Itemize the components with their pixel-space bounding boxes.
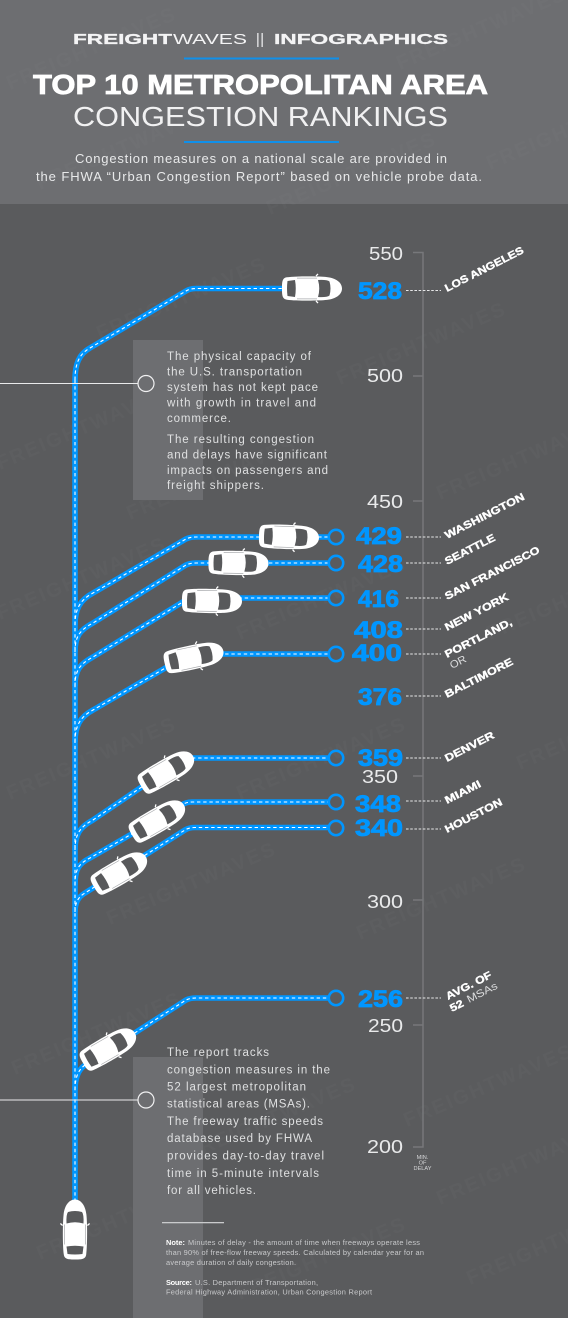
note: Note: xyxy=(166,1238,185,1247)
leader lines xyxy=(406,290,441,998)
top header rule xyxy=(184,58,339,60)
text block: report: 52 largest metropolitan xyxy=(167,1082,306,1094)
text block: capacity: impacts on passengers and xyxy=(167,465,328,477)
metro labels: OR xyxy=(448,653,469,672)
text block: report: provides day-to-day travel xyxy=(167,1150,324,1162)
icon: car Houston xyxy=(87,844,153,900)
subtitle: Congestion measures on a national scale are provided in xyxy=(75,151,447,166)
source xyxy=(166,1278,372,1296)
brand line: FREIGHT xyxy=(73,32,172,48)
axis: 450 xyxy=(367,491,403,512)
callout: capacity connector xyxy=(0,376,154,392)
metro labels: SEATTLE xyxy=(443,532,497,568)
brand line xyxy=(73,32,449,48)
text block: report: congestion measures in the xyxy=(167,1064,330,1076)
values: 340 xyxy=(355,815,403,842)
subtitle: the FHWA “Urban Congestion Report” based on vehicle probe data. xyxy=(36,169,482,184)
source: U.S. Department of Transportation, xyxy=(195,1278,318,1287)
brand line: INFOGRAPHICS xyxy=(274,32,449,48)
icon: car Seattle xyxy=(208,548,269,578)
callout: report connector xyxy=(0,1092,154,1108)
axis unit: OF xyxy=(419,1160,427,1166)
note: than 90% of free-flow freeway speeds. Calculated by calendar year for an xyxy=(166,1248,424,1257)
metro labels: AVG. OF xyxy=(444,969,495,1003)
text block: capacity: The physical capacity of xyxy=(167,351,312,363)
title xyxy=(33,69,488,132)
text block: capacity xyxy=(166,351,328,492)
source: Federal Highway Administration, Urban Congestion Report xyxy=(166,1288,372,1296)
note: Minutes of delay - the amount of time when freeways operate less xyxy=(188,1238,420,1247)
metro labels xyxy=(443,244,542,1015)
bottom header rule xyxy=(184,141,339,143)
metro labels: LOS ANGELES xyxy=(443,244,526,295)
axis: 300 xyxy=(367,891,403,912)
title: TOP 10 METROPOLITAN AREA xyxy=(33,69,488,100)
header panel xyxy=(0,0,568,204)
road end markers xyxy=(329,530,343,1005)
icon: car Denver xyxy=(134,743,200,799)
brand line: || xyxy=(256,32,264,48)
values: 429 xyxy=(356,523,402,550)
metro labels: NEW YORK xyxy=(443,591,511,634)
callout shade 1 xyxy=(133,340,203,500)
text block: capacity: The resulting congestion xyxy=(167,434,314,446)
text block: report xyxy=(167,1047,330,1197)
text block: report: for all vehicles. xyxy=(167,1185,256,1197)
values xyxy=(352,278,403,1013)
source: Source: xyxy=(166,1278,192,1287)
text block: capacity: commerce. xyxy=(167,413,231,425)
text block: capacity: freight shippers. xyxy=(167,480,264,492)
axis unit: DELAY xyxy=(414,1166,432,1172)
text block: capacity: and delays have significant xyxy=(167,450,328,462)
metro labels: WASHINGTON xyxy=(443,491,527,542)
icon: car San Francisco xyxy=(182,586,242,616)
icon: car start xyxy=(60,1200,90,1260)
note xyxy=(166,1238,424,1267)
icon: car Los Angeles xyxy=(282,274,342,303)
values: 416 xyxy=(358,586,399,613)
metro labels: MSAs xyxy=(465,980,500,1006)
axis: 550 xyxy=(369,243,403,264)
metro labels: BALTIMORE xyxy=(443,656,515,701)
text block: report: database used by FHWA xyxy=(167,1133,312,1145)
icon: car Miami xyxy=(125,792,191,848)
notes divider xyxy=(162,1222,224,1223)
text block: capacity: the U.S. transportation xyxy=(167,366,302,378)
text block: capacity: with growth in travel and xyxy=(166,398,316,410)
metro labels: MIAMI xyxy=(443,778,483,807)
brand line: WAVES xyxy=(173,32,247,48)
note: average duration of daily congestion. xyxy=(166,1258,296,1267)
text block: report: The freeway traffic speeds xyxy=(167,1116,323,1128)
text block: report: statistical areas (MSAs). xyxy=(167,1098,310,1110)
axis: 500 xyxy=(367,365,403,386)
axis: 250 xyxy=(368,1015,403,1036)
values: 348 xyxy=(355,791,401,818)
values: 408 xyxy=(354,617,403,644)
metro labels: DENVER xyxy=(443,729,497,765)
axis: 350 xyxy=(362,766,398,787)
values: 400 xyxy=(352,640,402,667)
icon: car average xyxy=(76,1020,142,1076)
metro labels: PORTLAND, xyxy=(443,616,514,661)
axis unit xyxy=(414,1155,432,1172)
icon: car Portland xyxy=(162,636,226,678)
icon: car Washington xyxy=(259,521,319,553)
axis unit: MIN. xyxy=(417,1155,429,1161)
subtitle xyxy=(36,151,482,184)
road network xyxy=(75,288,330,1205)
metro labels: HOUSTON xyxy=(443,796,504,836)
title: CONGESTION RANKINGS xyxy=(73,101,448,132)
values: 359 xyxy=(358,745,403,772)
metro labels: SAN FRANCISCO xyxy=(443,544,542,603)
callout shade 2 xyxy=(133,1057,203,1318)
values: 428 xyxy=(358,551,403,578)
text block: report: The report tracks xyxy=(167,1047,269,1059)
metro labels: 52 xyxy=(448,998,466,1015)
values: 376 xyxy=(358,684,402,711)
text block: capacity: system has not kept pace xyxy=(167,382,318,394)
text block: report: time in 5-minute intervals xyxy=(167,1168,319,1180)
axis: 200 xyxy=(367,1136,403,1157)
axis xyxy=(362,243,423,1157)
values: 528 xyxy=(358,278,402,305)
values: 256 xyxy=(358,986,403,1013)
